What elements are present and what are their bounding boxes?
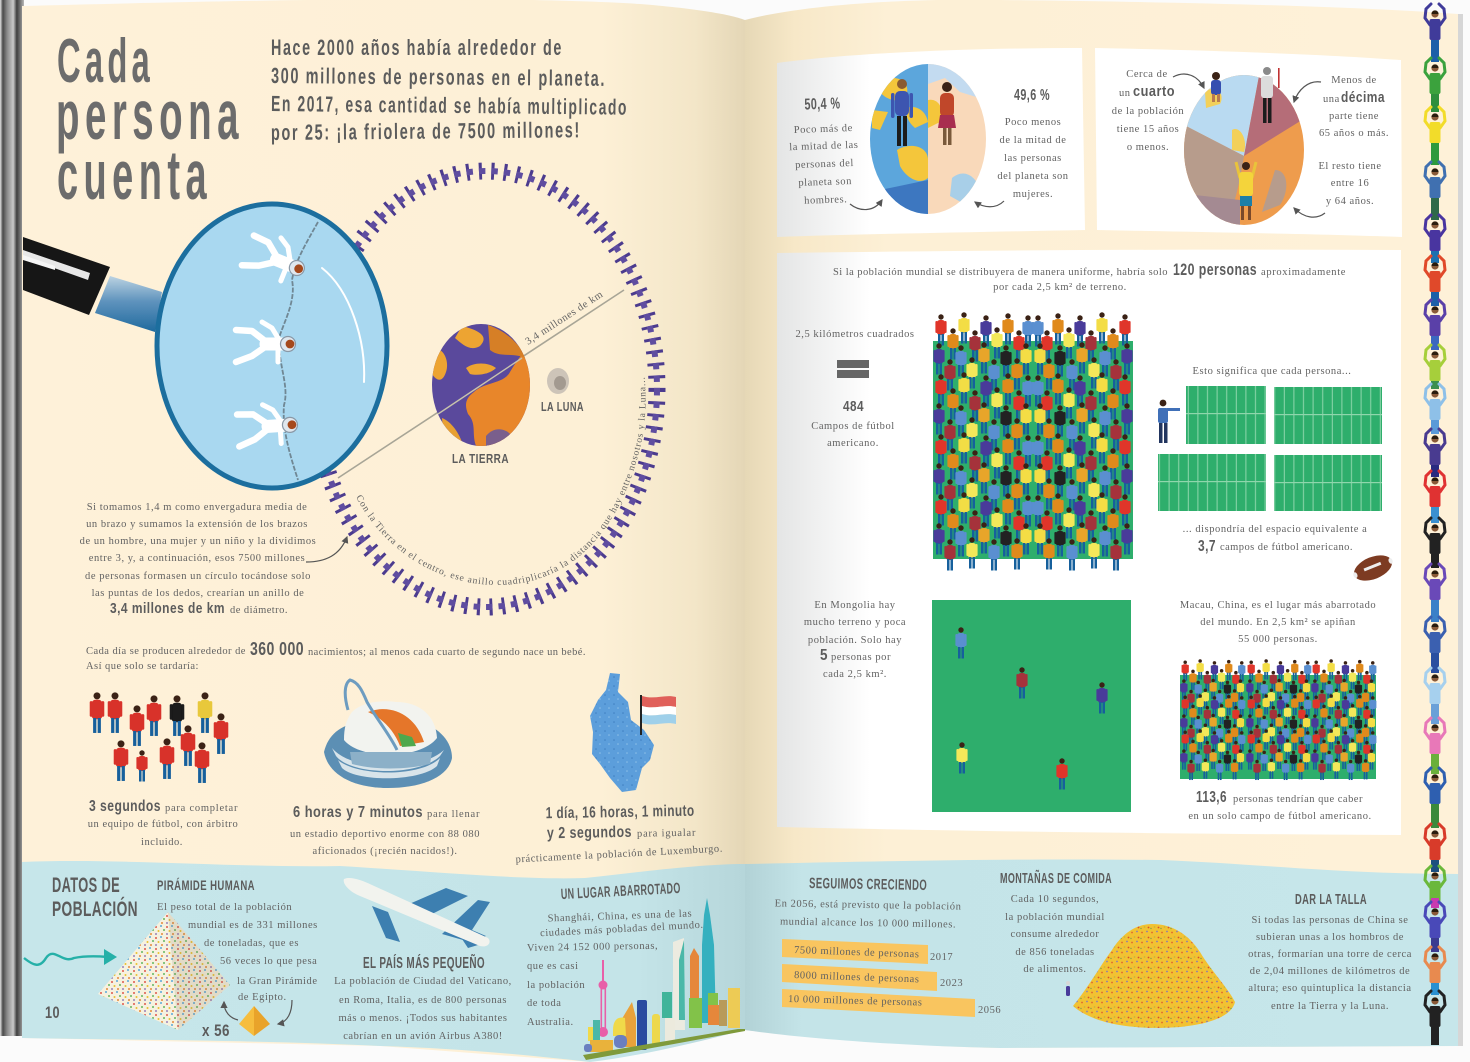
text: 3,7 fields: campos de fútbol americano. — [1220, 542, 1353, 553]
ring explanation paragraph: las puntas de los dedos, crearían un anillo de — [92, 588, 304, 599]
text: dar la talla: entre la Tierra y la Luna. — [1271, 1001, 1389, 1012]
airplane — [344, 878, 490, 948]
ring explanation paragraph: 3,4 millones de km — [110, 600, 225, 617]
text: seguimos creciendo — [775, 875, 962, 931]
text: 50,4 % men: 50,4 % — [804, 95, 841, 114]
Luxembourg map and flag — [590, 673, 676, 792]
rope of people — [279, 222, 318, 480]
arrows: ages — [1173, 74, 1325, 217]
caption: Luxembourg: prácticamente la población de Luxemburgo. — [515, 844, 723, 865]
text: dar la talla — [1248, 891, 1412, 1012]
bar 2017: 2017 — [930, 952, 953, 963]
pyramid — [98, 912, 230, 1030]
ring explanation paragraph: de un hombre, una mujer y un niño y la dividimos — [80, 536, 316, 547]
text: 2,5 km² equals 484 fields: 2,5 kilómetros cuadrados — [795, 329, 915, 340]
text: un lugar abarrotado: UN LUGAR ABARROTADO — [560, 880, 681, 903]
diameter line — [338, 290, 624, 478]
football team icon — [90, 692, 228, 783]
text: under 15: un — [1119, 88, 1131, 99]
adult figure — [1236, 162, 1256, 220]
text: over 65: El resto tiene — [1318, 161, 1382, 172]
arrows between pyramids — [224, 1000, 292, 1024]
text: el país más pequeño: más o menos. ¡Todos sus habitantes — [338, 1013, 508, 1024]
tower of people — [1425, 4, 1445, 1045]
text: under 15: Cerca de — [1126, 69, 1168, 80]
ring explanation paragraph: entre 3, y, a continuación, esos 7500 millones — [89, 553, 305, 564]
text: under 15: o menos. — [1127, 142, 1169, 153]
text: 50,4 % men: Poco más de — [794, 123, 853, 136]
icon: equals sign — [837, 360, 869, 378]
bar chart: growth — [782, 939, 1001, 1017]
text: montañas de comida: consume alrededor — [1011, 929, 1099, 940]
text: pirámide humana: 56 veces lo que pesa — [220, 956, 317, 967]
moon — [547, 368, 569, 394]
panel: men and women — [777, 48, 1085, 237]
text: pirámide humana: de Egipto. — [238, 992, 287, 1003]
text: seguimos creciendo: mundial alcance los 10 000 millones. — [780, 916, 956, 931]
right blue band — [745, 859, 1458, 1048]
text: dar la talla: subieran unas a los hombros de — [1256, 932, 1404, 943]
text: Mongolia: En Mongolia hay — [814, 600, 896, 611]
text: pirámide humana: El peso total de la población — [157, 902, 292, 913]
text: 49,6 % women: del planeta son — [997, 171, 1069, 182]
magnifying glass — [23, 204, 387, 488]
left page spine and page stack — [0, 0, 24, 1036]
text: un lugar abarrotado: Viven 24 152 000 personas, — [527, 941, 658, 954]
bar 2056: 2056 — [978, 1005, 1001, 1016]
text: dar la talla: DAR LA TALLA — [1295, 891, 1367, 908]
text: over 65: décima — [1341, 89, 1385, 106]
title: cuenta — [57, 136, 212, 214]
text: pirámide humana: la Gran Pirámide — [237, 976, 318, 987]
text: montañas de comida: la población mundial — [1005, 912, 1105, 923]
small pyramid — [239, 1006, 270, 1036]
text: 50,4 % men: planeta son — [798, 176, 852, 189]
bar 2056 — [782, 989, 1001, 1017]
text: 3,7 fields: 3,7 — [1198, 538, 1216, 555]
text: un lugar abarrotado: de toda — [527, 998, 561, 1009]
text: Macau — [1180, 600, 1376, 645]
text: un lugar abarrotado: Shanghái, China, es una de las — [548, 908, 692, 925]
right page background — [745, 0, 1458, 1048]
text: el país más pequeño: La población de Ciudad del Vaticano, — [334, 976, 512, 987]
panel: population density — [777, 250, 1401, 835]
caption: football team: para completar — [165, 803, 238, 814]
left blue band — [22, 861, 745, 1062]
text: 50,4 % men: hombres. — [804, 194, 848, 207]
astronaut middle — [236, 322, 296, 362]
Shanghai skyline — [583, 898, 745, 1060]
curved ring caption: Con la Tierra en el centro, ese anillo cuadriplicaría la distancia que hay entre nosotros y la Luna... — [357, 378, 646, 585]
births intro text — [86, 639, 586, 672]
bar 2017: 7500 millones de personas — [794, 945, 920, 960]
diameter label: 3,4 millones de km — [524, 289, 605, 348]
caption: football team: un equipo de fútbol, con árbitro — [88, 819, 238, 830]
text: over 65 — [1318, 75, 1389, 207]
intro text: Hace 2000 años había alrededor de — [271, 35, 563, 60]
heading: datos de población — [52, 874, 138, 921]
text: un lugar abarrotado: que es casi — [527, 961, 579, 972]
text: under 15: cuarto — [1133, 83, 1175, 100]
label: x 56: x 56 — [202, 1021, 230, 1040]
american football fields — [1158, 386, 1382, 511]
caption: Luxembourg — [515, 802, 723, 865]
caption: Luxembourg: y 2 segundos — [547, 824, 632, 842]
text: el país más pequeño: en Roma, Italia, es de 800 personas — [339, 995, 507, 1006]
text: each person: Esto significa que cada persona... — [1193, 366, 1351, 377]
title: Cada — [57, 27, 154, 96]
text: montañas de comida: Cada 10 segundos, — [1011, 894, 1099, 905]
globe: gender split — [870, 64, 986, 214]
text: dar la talla: altura; eso quintuplica la distancia — [1248, 983, 1412, 994]
text: Mongolia: 5 — [820, 647, 828, 664]
text: 2,5 km² equals 484 fields: 484 — [843, 398, 864, 415]
bar 2056: 10 000 millones de personas — [788, 994, 923, 1009]
caption: stadium — [290, 804, 480, 857]
ring explanation paragraph: Si tomamos 1,4 m como envergadura media de — [87, 502, 307, 513]
births intro text: Así que solo se tardaría: — [86, 661, 199, 672]
intro text — [271, 35, 628, 145]
person pointing at fields — [1158, 400, 1180, 443]
text: 50,4 % men — [788, 95, 861, 207]
text: 113,6 persons — [1188, 789, 1372, 822]
ring explanation paragraph: un brazo y sumamos la extensión de los brazos — [86, 519, 308, 530]
elder figure — [1261, 67, 1280, 123]
text: montañas de comida: MONTAÑAS DE COMIDA — [1000, 869, 1112, 887]
text: dar la talla: de 2,04 millones de kilómetros de — [1250, 966, 1410, 977]
caption: Luxembourg: para igualar — [637, 828, 696, 840]
title — [56, 27, 244, 214]
astronaut top — [242, 228, 312, 287]
text: pirámide humana — [157, 877, 318, 1003]
bar 2023: 2023 — [940, 978, 963, 989]
text: dar la talla: otras, formarían una torre de cerca — [1248, 949, 1412, 960]
text: over 65: parte tiene — [1329, 111, 1379, 122]
label: la tierra: LA TIERRA — [452, 451, 509, 466]
text: 113,6 persons: 113,6 — [1196, 789, 1227, 806]
text: un lugar abarrotado: ciudades más pobladas del mundo. — [540, 920, 704, 939]
ring explanation paragraph — [80, 502, 316, 617]
woman figure — [938, 82, 956, 145]
bar 2023: 8000 millones de personas — [794, 970, 920, 985]
text: Mongolia: población. Solo hay — [808, 635, 902, 646]
text: 120 persons headline: por cada 2,5 km² de terreno. — [993, 282, 1127, 293]
text: 49,6 % women: Poco menos — [1005, 117, 1061, 128]
text: over 65: 65 años o más. — [1319, 128, 1389, 139]
text: un lugar abarrotado: Australia. — [527, 1017, 574, 1028]
ring of people around the Earth — [315, 171, 657, 607]
caption: stadium: aficionados (¡recién nacidos!). — [312, 846, 458, 857]
text: 49,6 % women: las personas — [1004, 153, 1062, 164]
text: Macau: Macau, China, es el lugar más abarrotado — [1180, 600, 1376, 611]
text: under 15 — [1112, 69, 1184, 153]
text: seguimos creciendo: SEGUIMOS CRECIENDO — [809, 875, 927, 894]
title: persona — [56, 76, 244, 154]
arrow to ring — [306, 537, 347, 562]
bar 2023 — [782, 964, 963, 991]
label: la luna: LA LUNA — [541, 399, 584, 414]
text: over 65: una — [1323, 94, 1340, 105]
icon: american football — [1349, 550, 1397, 586]
right page edge — [1458, 14, 1463, 1046]
text: un lugar abarrotado — [527, 880, 704, 1028]
text: seguimos creciendo: En 2056, está previsto que la población — [775, 898, 962, 913]
text: 3,7 fields: ... dispondría del espacio equivalente a — [1183, 524, 1367, 535]
caption: stadium: un estadio deportivo enorme con 88 080 — [290, 829, 480, 840]
text: pirámide humana: PIRÁMIDE HUMANA — [157, 877, 255, 893]
stadium icon — [324, 680, 452, 788]
caption: football team: 3 segundos — [89, 798, 161, 815]
child figure — [1211, 72, 1221, 102]
text: 2,5 km² equals 484 fields: americano. — [827, 438, 879, 449]
sparse field: Mongolia — [932, 600, 1131, 812]
intro text: 300 millones de personas en el planeta. — [271, 63, 606, 91]
text: Mongolia: personas por — [831, 652, 891, 663]
births intro text: Cada día se producen alrededor de — [86, 646, 246, 657]
text: 120 persons headline — [833, 260, 1346, 293]
text: 49,6 % women: de la mitad de — [1000, 135, 1066, 146]
handle — [23, 237, 162, 332]
caption: football team: incluido. — [141, 837, 183, 848]
text: un lugar abarrotado: la población — [527, 980, 585, 991]
text: 2,5 km² equals 484 fields: Campos de fútbol — [811, 421, 895, 432]
text: pirámide humana: de toneladas, que es — [204, 938, 299, 949]
text: 3,7 fields — [1183, 524, 1367, 555]
text: el país más pequeño: EL PAÍS MÁS PEQUEÑO — [363, 952, 485, 972]
text: 120 persons headline: Si la población mundial se distribuyera de manera uniforme, habría solo — [833, 267, 1168, 278]
text: 49,6 % women: mujeres. — [1013, 189, 1053, 200]
text: 50,4 % men: la mitad de las — [789, 140, 859, 153]
tiny person beside mountain — [1066, 981, 1070, 996]
page number: 10 — [45, 1003, 60, 1022]
text: over 65: entre 16 — [1331, 178, 1369, 189]
caption: football team — [88, 798, 238, 848]
text: Macau: del mundo. En 2,5 km² se apiñan — [1200, 617, 1356, 628]
text: 113,6 persons: en un solo campo de fútbol americano. — [1188, 811, 1372, 822]
crowd field: 120 people — [933, 312, 1133, 570]
text: 49,6 % women — [997, 87, 1069, 200]
lens highlight — [322, 268, 364, 382]
text: 120 persons headline: 120 personas — [1173, 260, 1257, 279]
text: el país más pequeño — [334, 952, 512, 1042]
births intro text: nacimientos; al menos cada cuarto de segundo nace un bebé. — [308, 647, 586, 658]
births intro text: 360 000 — [250, 639, 304, 659]
text: montañas de comida — [1000, 869, 1112, 975]
bar 2017 — [782, 939, 953, 964]
text: dar la talla: Si todas las personas de China se — [1252, 915, 1408, 926]
intro text: En 2017, esa cantidad se había multiplicado — [271, 91, 628, 120]
text: under 15: de la población — [1112, 106, 1184, 117]
food mountain — [1073, 924, 1235, 1028]
crowd field: Macau — [1180, 659, 1376, 780]
man figure — [891, 79, 913, 146]
text: 49,6 % women: 49,6 % — [1014, 87, 1050, 104]
text: 2,5 km² equals 484 fields — [795, 329, 915, 449]
text: Macau: 55 000 personas. — [1238, 634, 1318, 645]
ring explanation paragraph: de diámetro. — [230, 605, 288, 616]
text: 120 persons headline: aproximadamente — [1261, 267, 1346, 278]
panel: age groups — [1095, 48, 1402, 237]
caption: Luxembourg: 1 día, 16 horas, 1 minuto — [545, 803, 695, 822]
caption: stadium: para llenar — [427, 809, 480, 820]
intro text: por 25: ¡la friolera de 7500 millones! — [271, 117, 581, 145]
text: montañas de comida: de 856 toneladas — [1015, 947, 1095, 958]
heading: datos de población: POBLACIÓN — [52, 897, 138, 921]
text: Mongolia: mucho terreno y poca — [804, 617, 906, 628]
lens — [157, 204, 387, 488]
globe: age pie chart — [1184, 60, 1310, 225]
text: montañas de comida: de alimentos. — [1023, 964, 1087, 975]
text: el país más pequeño: cabrían en un avión Airbus A380! — [343, 1031, 503, 1042]
heading: datos de población: DATOS DE — [52, 874, 120, 897]
arrows: gender — [850, 200, 1004, 210]
text: 50,4 % men: personas del — [795, 158, 854, 171]
text: over 65: Menos de — [1331, 75, 1377, 86]
text: Mongolia: cada 2,5 km². — [823, 669, 887, 680]
earth — [432, 324, 535, 450]
left page background — [22, 0, 745, 1062]
text: pirámide humana: mundial es de 331 millones — [188, 920, 318, 931]
text: Mongolia — [804, 600, 906, 680]
caption: stadium: 6 horas y 7 minutos — [293, 804, 423, 821]
text: over 65: y 64 años. — [1326, 196, 1374, 207]
astronaut bottom — [237, 402, 299, 446]
text: 113,6 persons: personas tendrían que caber — [1233, 794, 1363, 805]
arrow: wavy teal — [24, 949, 117, 965]
text: under 15: tiene 15 años — [1117, 124, 1179, 135]
ring explanation paragraph: de personas formasen un círculo tocándose solo — [85, 571, 311, 582]
